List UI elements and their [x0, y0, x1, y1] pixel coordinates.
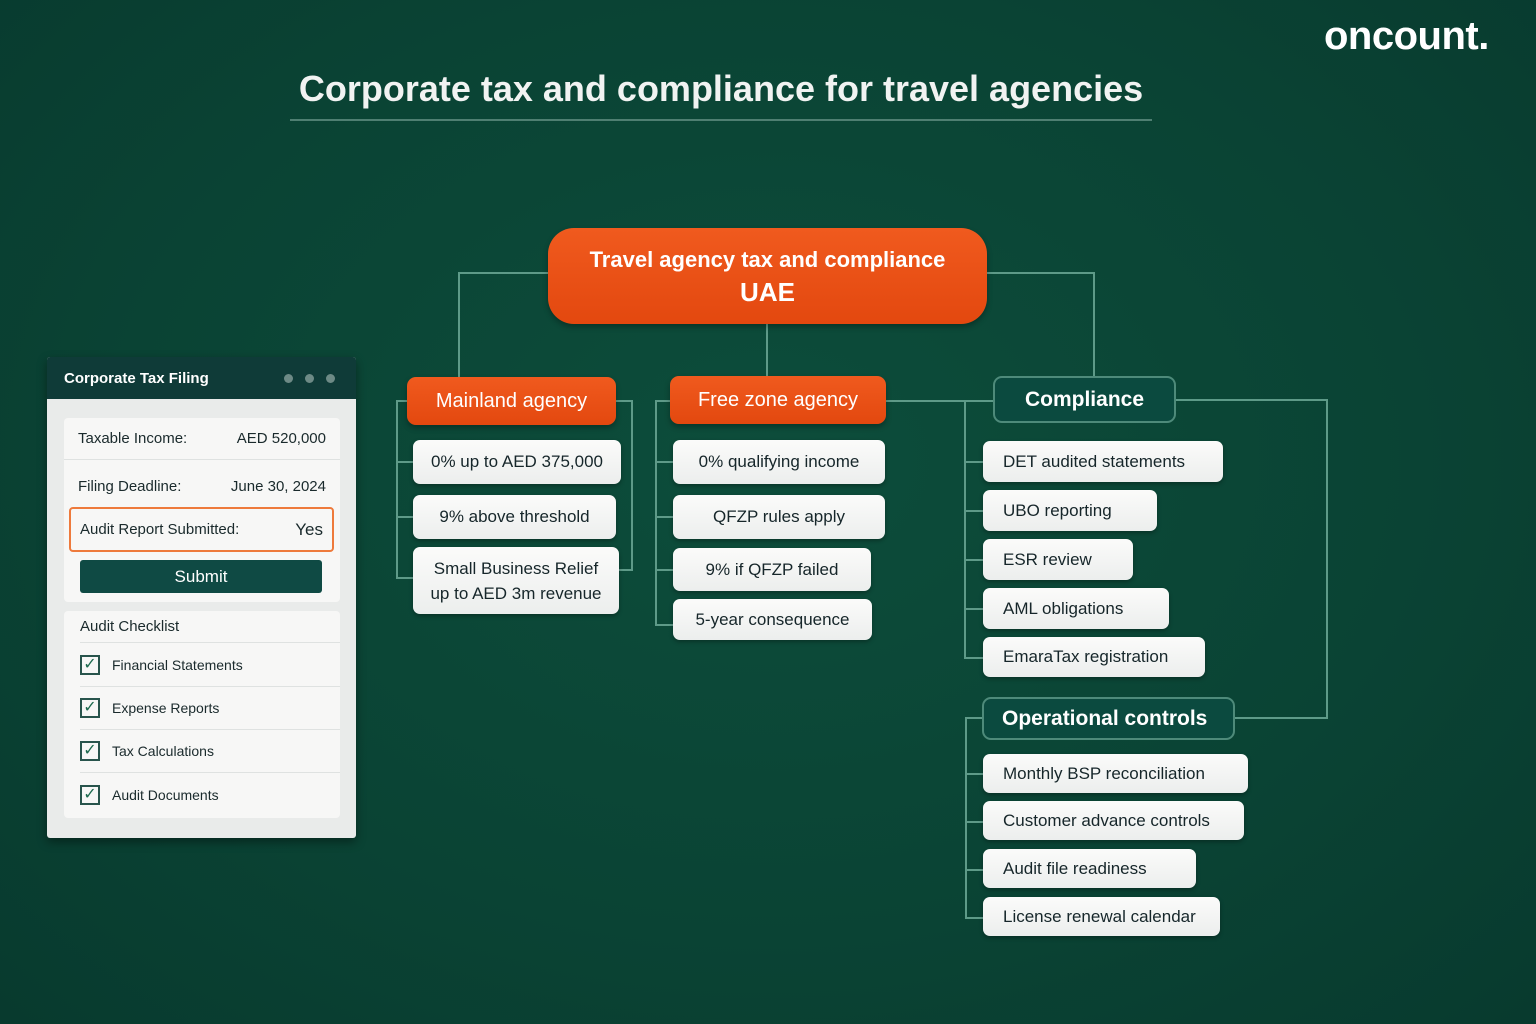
compliance items: DET audited statements	[1003, 452, 1185, 470]
free zone items: 5-year consequence	[695, 610, 850, 628]
panel header	[47, 357, 356, 399]
free zone header	[670, 376, 886, 424]
operational items	[981, 754, 1248, 938]
free zone items	[671, 440, 886, 642]
audit checklist card: Financial Statements	[112, 657, 243, 673]
audit checklist card: ✓	[83, 742, 97, 759]
logo: oncount.	[1324, 14, 1489, 58]
free zone items: 9% if QFZP failed	[706, 560, 838, 578]
free zone items: QFZP rules apply	[713, 507, 845, 526]
free zone items: 0% qualifying income	[699, 452, 859, 471]
audit checklist card: Audit Checklist	[80, 618, 179, 635]
filing card: AED 520,000	[237, 430, 326, 447]
compliance items: ESR review	[1003, 550, 1092, 568]
audit checklist card: ✓	[83, 786, 97, 802]
audit checklist card: ✓	[83, 656, 97, 673]
title underline	[290, 119, 1152, 121]
compliance items	[981, 441, 1224, 680]
mainland header	[407, 377, 616, 425]
operational items: License renewal calendar	[1003, 906, 1196, 926]
filing card	[64, 418, 340, 602]
submit button	[80, 560, 322, 593]
audit checklist card: Audit Documents	[112, 786, 219, 802]
operational controls header: Operational controls	[1002, 706, 1207, 730]
mainland items: Small Business Relief	[434, 558, 598, 578]
audit checklist card: Tax Calculations	[112, 743, 214, 759]
audit checklist card	[64, 611, 340, 818]
audit submitted highlight: Yes	[295, 520, 323, 538]
operational items: Customer advance controls	[1003, 810, 1210, 830]
root node	[548, 228, 987, 324]
audit submitted highlight	[69, 507, 334, 552]
submit button: Submit	[175, 567, 227, 586]
mainland items: up to AED 3m revenue	[430, 584, 602, 602]
operational controls header	[982, 697, 1235, 740]
audit checklist card: ✓	[83, 699, 97, 716]
compliance header: Compliance	[1025, 388, 1144, 410]
free zone header: Free zone agency	[698, 388, 858, 410]
compliance items: AML obligations	[1003, 598, 1123, 618]
mainland items: 9% above threshold	[439, 507, 590, 526]
mainland header: Mainland agency	[436, 390, 587, 412]
compliance header	[993, 376, 1176, 423]
root node: Travel agency tax and compliance	[590, 247, 945, 272]
audit submitted highlight: Audit Report Submitted:	[80, 521, 239, 538]
mainland items	[411, 440, 622, 616]
title: Corporate tax and compliance for travel agencies	[299, 68, 1143, 109]
mainland items: 0% up to AED 375,000	[431, 452, 603, 471]
compliance items: UBO reporting	[1003, 500, 1112, 520]
operational items: Audit file readiness	[1003, 858, 1147, 878]
operational items: Monthly BSP reconciliation	[1003, 764, 1205, 782]
compliance items: EmaraTax registration	[1003, 647, 1168, 666]
root node: UAE	[740, 277, 795, 307]
panel header: Corporate Tax Filing	[64, 370, 209, 387]
audit checklist card: Expense Reports	[112, 700, 219, 716]
filing card: June 30, 2024	[231, 478, 326, 494]
filing card: Taxable Income:	[78, 430, 187, 447]
panel: corporate tax filing	[47, 357, 356, 838]
filing card: Filing Deadline:	[78, 478, 181, 494]
